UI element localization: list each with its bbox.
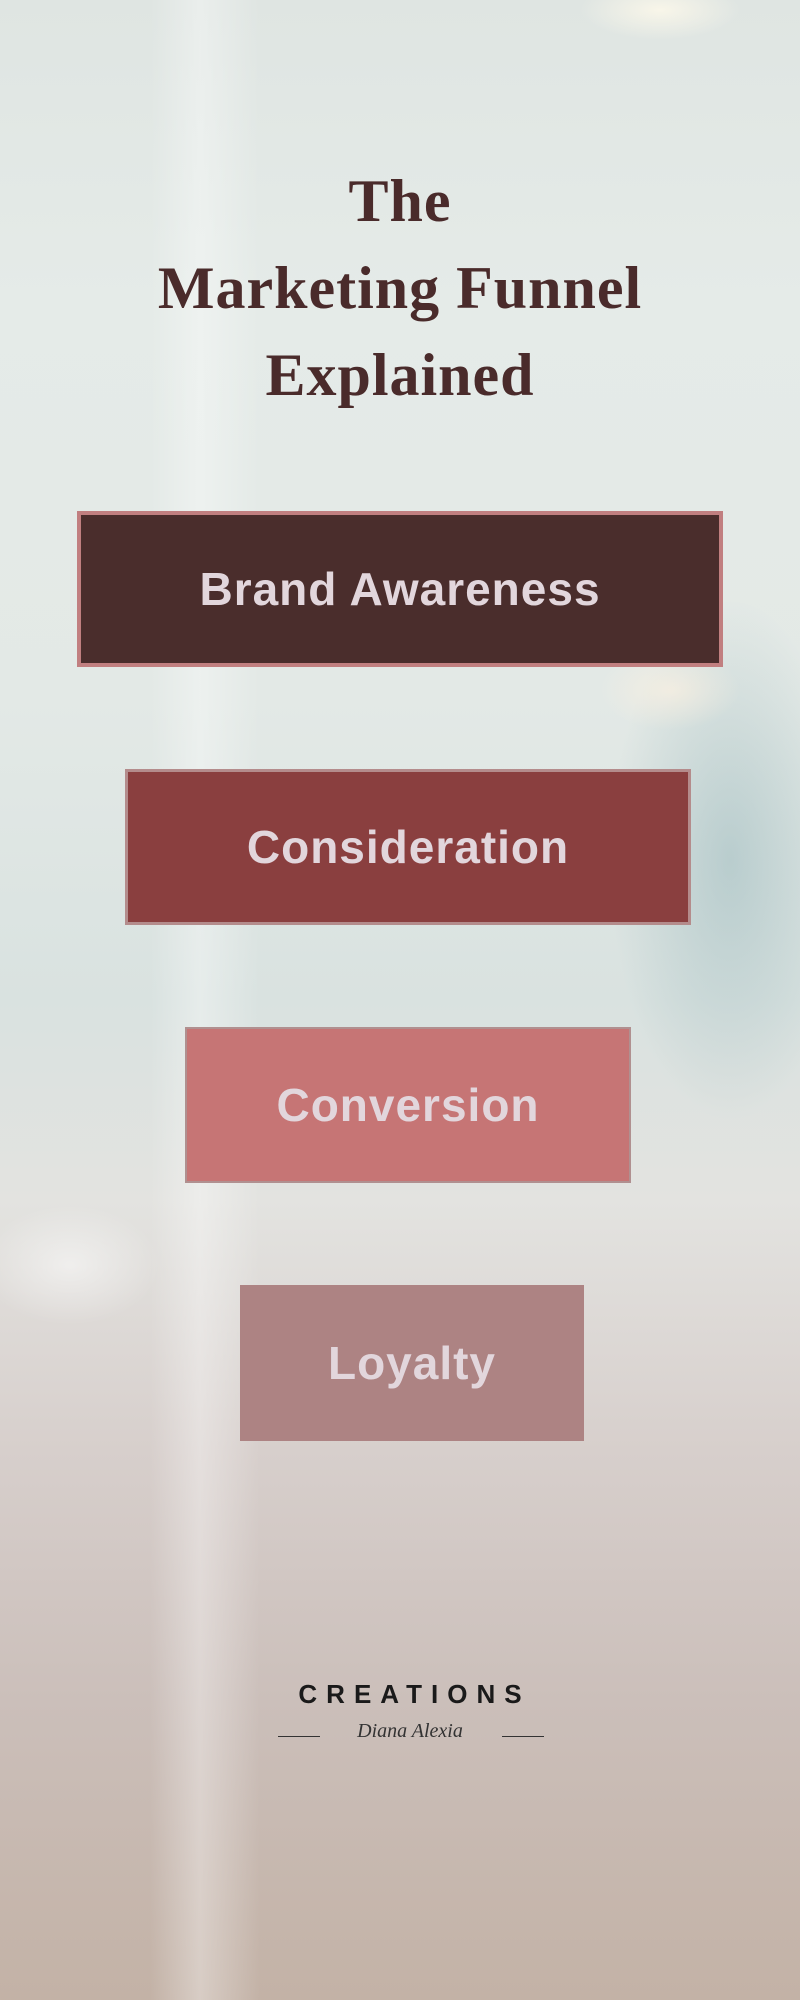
title: Marketing Funnel (158, 255, 642, 321)
funnel stage: Brand Awareness: Brand Awareness (199, 563, 601, 615)
logo wordmark: CREATIONS (298, 1679, 531, 1709)
funnel stage: Consideration: Consideration (247, 821, 569, 873)
funnel stage: Consideration (125, 769, 691, 925)
funnel stage: Conversion (185, 1027, 631, 1183)
title: The (348, 168, 452, 234)
funnel stage: Brand Awareness (77, 511, 723, 667)
title (158, 168, 642, 408)
funnel stage: Loyalty (240, 1285, 584, 1441)
title: Explained (265, 342, 535, 408)
logo (278, 1679, 544, 1742)
logo signature: Diana Alexia (357, 1720, 463, 1742)
funnel stage: Loyalty: Loyalty (328, 1337, 496, 1389)
funnel stage: Conversion: Conversion (276, 1079, 540, 1131)
